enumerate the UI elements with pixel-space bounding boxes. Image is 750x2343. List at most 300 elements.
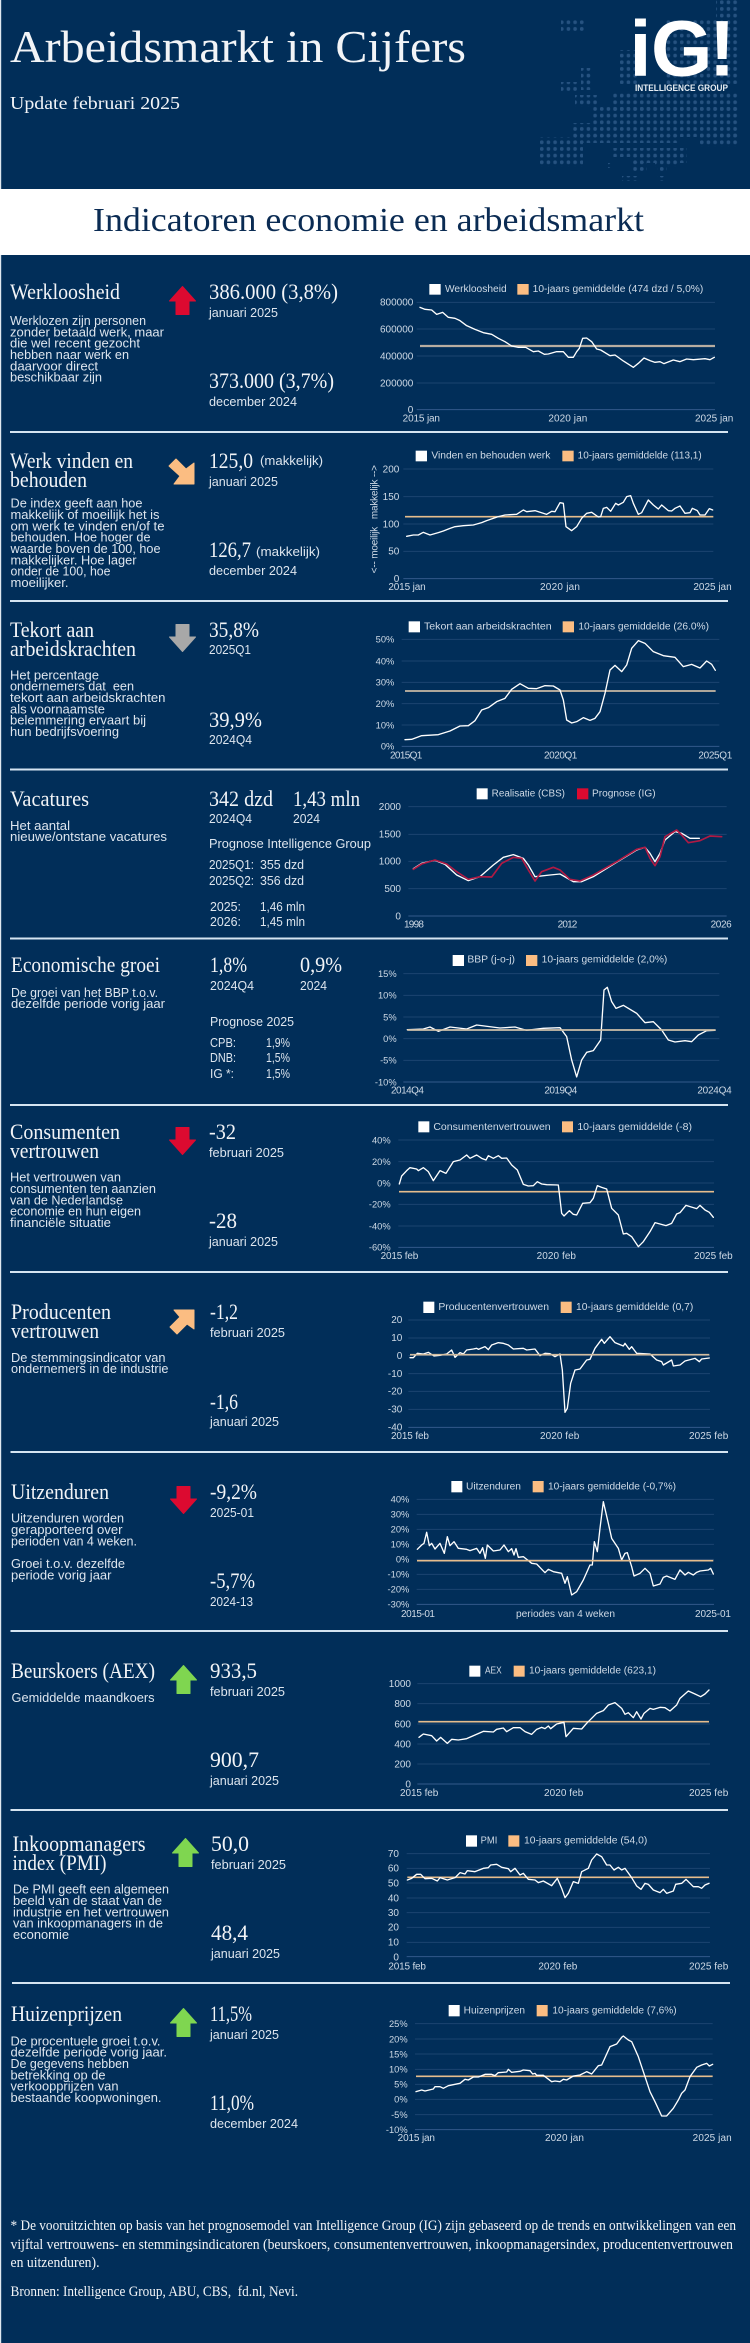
axis labels: 50 [388, 547, 400, 558]
axis labels: -40 [388, 1422, 403, 1433]
axis labels: 2020 feb [538, 1961, 578, 1972]
heading [12, 1831, 146, 1875]
year value [293, 786, 360, 826]
legend: Uitzenduren [466, 1481, 521, 1492]
axis labels: -30 [388, 1405, 403, 1416]
divider [10, 1809, 728, 1811]
current value [209, 617, 259, 657]
legend: 10-jaars gemiddelde (26.0%) [578, 621, 709, 632]
previous value [209, 707, 262, 747]
forecast table: 1,46 mln [260, 900, 305, 914]
previous value [209, 537, 320, 578]
axis labels: 1500 [379, 829, 401, 840]
panel: werk vinden en behouden [9, 448, 732, 593]
legend: 10-jaars gemiddelde (2,0%) [542, 955, 667, 966]
line chart: tekort aan arbeidskrachten [376, 621, 733, 761]
axis labels: 2015-01 [401, 1609, 435, 1620]
description: perioden van 4 weken. [11, 1534, 137, 1548]
current value: -1,2 [210, 1299, 238, 1324]
current value: 125,0 [209, 448, 253, 473]
quarter value: 342 dzd [209, 786, 273, 811]
icon: orange arrow up-right [170, 1310, 194, 1334]
legend [418, 1121, 692, 1133]
heading: Beurskoers (AEX) [11, 1658, 155, 1683]
previous value [210, 1568, 255, 1609]
current value [210, 1658, 285, 1699]
forecast table: 1,9% [266, 1036, 290, 1050]
previous value: -1,6 [210, 1389, 238, 1414]
footnote [10, 2218, 737, 2271]
axis labels: 20% [376, 699, 394, 709]
legend: Realisatie (CBS) [492, 788, 565, 799]
axis labels: 2020 feb [537, 1251, 576, 1262]
line chart: uitzenduren [388, 1481, 731, 1620]
axis labels: 0% [381, 742, 394, 752]
forecast table: 355 dzd [260, 858, 304, 872]
previous value [209, 1747, 279, 1788]
description: nieuwe/ontstane vacatures [10, 830, 167, 844]
legend: Tekort aan arbeidskrachten [424, 621, 552, 632]
forecast table: 2025Q2: [209, 874, 254, 888]
description: Uitzenduren worden [11, 1512, 124, 1526]
description: daarvoor direct [10, 359, 99, 373]
divider [10, 938, 728, 940]
icon: red arrow down [170, 1128, 196, 1154]
description: betrekking op de [10, 2068, 106, 2082]
heading: arbeidskrachten [10, 636, 136, 661]
description: financiële situatie [10, 1216, 111, 1230]
footnote: en uitzenduren). [10, 2255, 100, 2271]
divider [10, 1104, 728, 1106]
axis labels: 2012 [558, 919, 578, 930]
line chart: producentenvertrouwen [388, 1302, 729, 1442]
current value [209, 1119, 284, 1160]
logo: Intelligence Group: G [651, 4, 712, 92]
description [11, 1351, 169, 1376]
axis labels: 400 [394, 1739, 411, 1750]
current value: januari 2025 [208, 306, 278, 320]
axis labels: 50% [376, 635, 394, 645]
current value: 50,0 [211, 1831, 249, 1856]
forecast table: CPB: [210, 1036, 236, 1050]
axis labels [386, 2019, 732, 2144]
current value: januari 2025 [209, 2028, 279, 2042]
legend: 10-jaars gemiddelde (-8) [577, 1122, 692, 1133]
axis labels: 5% [383, 1012, 397, 1022]
line chart: economische groei [375, 955, 732, 1096]
previous value: december 2024 [210, 2117, 298, 2131]
axis labels: 100 [383, 519, 400, 530]
forecast table: Prognose Intelligence Group [209, 837, 371, 851]
axis labels: 25% [389, 2019, 408, 2029]
previous value [210, 2090, 298, 2131]
current value [209, 2001, 279, 2042]
year value: 2024 [300, 979, 327, 993]
axis labels [369, 1135, 733, 1262]
axis labels: 2015 feb [388, 1961, 426, 1972]
panel: uitzenduren [11, 1479, 731, 1620]
panel: werkloosheid [10, 279, 733, 425]
axis labels [388, 1849, 729, 1972]
description: gerapporteerd over [11, 1523, 122, 1537]
previous value: januari 2025 [210, 1947, 280, 1961]
line chart: werkloosheid [380, 284, 733, 425]
legend [453, 955, 667, 966]
legend [449, 2005, 677, 2016]
forecast table: 1,5% [266, 1067, 290, 1081]
heading [11, 1299, 111, 1343]
year value: 2024 [293, 812, 320, 826]
axis labels: -20% [369, 1200, 391, 1210]
icon: red arrow up [170, 286, 196, 314]
axis labels: 10% [391, 1540, 409, 1550]
description: Het aantal [10, 819, 70, 833]
year value: 0,9% [300, 952, 342, 977]
heading: vertrouwen [11, 1318, 99, 1343]
heading: Producenten [11, 1299, 111, 1324]
current value: januari 2025 [208, 475, 278, 489]
legend [451, 1481, 676, 1492]
axis labels [380, 298, 733, 425]
icon: green arrow up [170, 2008, 196, 2036]
legend: PMI [481, 1835, 497, 1846]
axis labels: 2015 feb [400, 1788, 439, 1799]
description: economie [13, 1928, 69, 1942]
forecast table: 2026: [210, 915, 241, 929]
heading: Huizenprijzen [11, 2001, 122, 2026]
header [10, 0, 740, 181]
quarter value: 1,8% [210, 952, 247, 977]
forecast table [210, 1015, 294, 1081]
axis labels: 30% [391, 1510, 409, 1520]
icon: green arrow up [172, 1838, 198, 1866]
legend: Vinden en behouden werk [431, 451, 550, 462]
quarter value [210, 952, 254, 993]
axis labels: 2015 jan [398, 2133, 435, 2144]
quarter value: 2024Q4 [210, 979, 254, 993]
description [9, 497, 165, 590]
previous value [209, 368, 334, 409]
axis labels: 500 [384, 884, 401, 895]
current value: februari 2025 [210, 1685, 285, 1699]
axis labels: 2020 jan [548, 414, 587, 425]
heading [10, 1119, 120, 1163]
axis labels: -20 [388, 1387, 403, 1398]
description [13, 1883, 169, 1942]
axis labels: 10% [376, 720, 394, 730]
decorative dot map of Europe [540, 0, 740, 181]
legend [423, 1302, 693, 1313]
legend: AEX [485, 1666, 502, 1677]
icon: grey arrow down [170, 624, 196, 652]
heading: Werk vinden en [10, 448, 133, 473]
axis labels: 2025Q1 [698, 750, 733, 761]
axis labels: -10% [375, 1077, 397, 1087]
description [11, 1512, 137, 1583]
axis labels: 10% [389, 2065, 408, 2075]
axis labels: 2015 feb [391, 1431, 429, 1442]
current value: (makkelijk) [260, 454, 323, 468]
legend: 10-jaars gemiddelde (54,0) [524, 1835, 647, 1846]
axis labels: 10% [378, 991, 397, 1001]
axis labels: 2025-01 [695, 1609, 731, 1620]
description: ondernemers dat een [10, 680, 134, 694]
description: beeld van de staat van de [13, 1894, 162, 1908]
current value: 2025-01 [210, 1506, 254, 1520]
axis labels: 60 [388, 1864, 399, 1875]
description: waarde boven de 100, hoe [9, 542, 161, 556]
axis labels: 0% [383, 1034, 397, 1044]
legend: 10-jaars gemiddelde (474 dzd / 5,0%) [533, 284, 703, 295]
current value: 11,5% [210, 2001, 252, 2026]
description: makkelijk of moeilijk het is [10, 508, 160, 522]
description: als voornaamste [10, 702, 105, 716]
axis labels: 600 [394, 1719, 411, 1730]
divider [10, 431, 728, 433]
current value [208, 279, 338, 320]
description [10, 314, 164, 385]
heading: index (PMI) [12, 1850, 106, 1875]
panel: inkoopmanagers index PMI [12, 1831, 729, 1972]
description [10, 668, 166, 739]
description: Het vertrouwen van [10, 1171, 121, 1185]
current value: 933,5 [210, 1658, 257, 1683]
legend [409, 621, 709, 632]
description: Het percentage [10, 668, 99, 682]
panel: tekort aan arbeidskrachten [10, 617, 733, 761]
description: De PMI geeft een algemeen [13, 1883, 169, 1897]
axis labels: -60% [369, 1243, 391, 1253]
previous value: -28 [209, 1208, 237, 1233]
description: consumenten ten aanzien [10, 1182, 156, 1196]
divider [10, 1271, 728, 1273]
axis labels [389, 1679, 729, 1799]
year value: 1,43 mln [293, 786, 360, 811]
description: hebben naar werk en [10, 348, 129, 362]
current value [210, 1299, 285, 1340]
axis labels: 600000 [380, 324, 414, 335]
previous value: januari 2025 [209, 1774, 279, 1788]
previous value: -5,7% [210, 1568, 255, 1593]
forecast table: 2025: [210, 900, 241, 914]
description: Groei t.o.v. dezelfde [11, 1557, 125, 1571]
axis labels: -10% [388, 1570, 409, 1580]
previous value: december 2024 [209, 564, 297, 578]
heading [10, 617, 136, 661]
previous value: 48,4 [211, 1920, 248, 1945]
panel: beurskoers AEX [11, 1658, 729, 1799]
axis labels: 2020 jan [540, 582, 580, 593]
divider [10, 1451, 728, 1453]
current value: -32 [209, 1119, 236, 1144]
axis labels: -5% [391, 2110, 408, 2120]
current value: 386.000 (3,8%) [209, 279, 338, 304]
forecast table: 2025Q1: [209, 858, 254, 872]
axis labels: 2020 jan [545, 2133, 584, 2144]
axis labels: 40% [376, 656, 394, 666]
description: hun bedrijfsvoering [10, 725, 119, 739]
axis labels: 2020 feb [544, 1788, 584, 1799]
previous value: 2024Q4 [209, 733, 252, 747]
axis labels: 2015 jan [403, 414, 440, 425]
legend: Huizenprijzen [464, 2005, 525, 2016]
forecast table: 1,45 mln [260, 915, 305, 929]
description [10, 1171, 156, 1230]
previous value: 126,7 [209, 537, 251, 562]
description: industrie en het vertrouwen [13, 1905, 169, 1919]
axis labels: 200 [394, 1759, 411, 1770]
axis labels: 2026 [711, 919, 732, 930]
forecast table: IG *: [210, 1067, 234, 1081]
description: moeilijker. [10, 576, 68, 590]
previous value [209, 1389, 279, 1429]
legend: 10-jaars gemiddelde (7,6%) [552, 2005, 677, 2016]
description: De procentuele groei t.o.v. [10, 2034, 160, 2048]
axis labels: 2014Q4 [391, 1085, 424, 1096]
current value: februari 2025 [211, 1858, 286, 1872]
axis labels: 20% [391, 1525, 409, 1535]
heading: vertrouwen [10, 1138, 99, 1163]
axis labels [369, 465, 732, 593]
legend [466, 1835, 647, 1847]
legend: Consumentenvertrouwen [433, 1122, 551, 1133]
current value: -9,2% [210, 1479, 257, 1504]
axis labels: 15% [378, 969, 397, 979]
axis labels: 1998 [404, 919, 424, 930]
axis labels [388, 1315, 729, 1442]
icon: orange arrow down-right [169, 459, 194, 484]
forecast table: 1,5% [266, 1051, 290, 1065]
previous value: 900,7 [210, 1747, 259, 1772]
previous value: december 2024 [209, 395, 297, 409]
axis labels: 2025 jan [693, 582, 732, 593]
current value: 2025Q1 [209, 643, 251, 657]
legend: Producentenvertrouwen [438, 1302, 549, 1313]
previous value: januari 2025 [208, 1235, 278, 1249]
description: ondernemers in de industrie [11, 1362, 169, 1376]
axis labels: 2025 jan [693, 2133, 732, 2144]
axis labels: -5% [380, 1056, 397, 1066]
axis labels [379, 802, 732, 930]
previous value: 2024-13 [210, 1595, 253, 1609]
panel: economische groei [11, 952, 732, 1096]
description: onder de 100, hoe [10, 565, 111, 579]
panel: producentenvertrouwen [11, 1299, 729, 1442]
logo: Intelligence Group [630, 4, 735, 94]
axis labels: -10% [386, 2125, 408, 2135]
heading: Werkloosheid [10, 279, 120, 304]
current value: februari 2025 [209, 1146, 284, 1160]
axis labels: 150 [383, 492, 400, 503]
previous value: 373.000 (3,7%) [209, 368, 334, 393]
quarter value [209, 786, 273, 826]
axis labels: 20% [389, 2034, 408, 2044]
description: behouden. Hoe hoger de [10, 531, 151, 545]
axis labels: 2015 jan [388, 582, 426, 593]
current value [208, 448, 323, 489]
axis labels: 15% [389, 2049, 408, 2059]
axis labels [376, 635, 733, 761]
description: De groei van het BBP t.o.v. [11, 986, 158, 1000]
previous value: januari 2025 [209, 1415, 279, 1429]
axis labels: -20% [388, 1585, 409, 1595]
description: Werklozen zijn personen [10, 314, 146, 328]
panel: huizenprijzen [10, 2001, 732, 2144]
heading: Inkoopmanagers [12, 1831, 146, 1856]
axis labels: 0% [394, 2095, 408, 2105]
description: De index geeft aan hoe [10, 497, 143, 511]
axis labels: 30% [376, 678, 394, 688]
description: dezelfde periode vorig jaar. [10, 2046, 167, 2060]
description: De gegevens hebben [10, 2057, 129, 2071]
axis labels: 1000 [389, 1679, 411, 1690]
quarter value: 2024Q4 [209, 812, 252, 826]
logo: Intelligence Group: INTELLIGENCE GROUP [635, 83, 729, 94]
legend: 10-jaars gemiddelde (623,1) [529, 1666, 656, 1677]
heading: Uitzenduren [11, 1479, 109, 1504]
axis labels: 30 [388, 1908, 399, 1919]
heading: Economische groei [11, 952, 160, 977]
axis labels: 1000 [379, 857, 401, 868]
legend [416, 451, 702, 462]
icon: green arrow up [170, 1666, 196, 1694]
logo: Intelligence Group: ! [709, 4, 735, 92]
axis labels: 40% [391, 1495, 409, 1505]
divider [10, 600, 728, 602]
axis labels: 50 [388, 1878, 399, 1889]
logo: Intelligence Group: i [630, 4, 651, 92]
axis labels: 0 [393, 1952, 399, 1963]
axis labels: 2025 feb [694, 1251, 733, 1262]
axis labels: 0 [408, 405, 414, 416]
axis labels: 10 [391, 1333, 403, 1344]
axis labels: 2019Q4 [544, 1085, 578, 1096]
section heading band: Indicatoren economie en arbeidsmarkt [93, 202, 645, 239]
legend: Prognose (IG) [592, 788, 656, 799]
previous value: 11,0% [210, 2090, 254, 2115]
axis labels: 2020 feb [540, 1431, 580, 1442]
year value [300, 952, 342, 993]
axis labels: 0 [394, 574, 400, 585]
axis labels: -40% [369, 1221, 391, 1231]
axis labels: periodes van 4 weken [516, 1609, 615, 1620]
description: economie en hun eigen [10, 1205, 141, 1219]
axis labels: 70 [388, 1849, 399, 1860]
line chart: beurskoers AEX [389, 1666, 729, 1799]
description: De stemmingsindicator van [11, 1351, 166, 1365]
axis labels: 2020Q1 [544, 750, 578, 761]
heading: Consumenten [10, 1119, 120, 1144]
legend [477, 788, 656, 799]
forecast table: Prognose 2025 [210, 1015, 294, 1029]
forecast table: 356 dzd [260, 874, 304, 888]
axis labels: 2000 [379, 802, 401, 813]
axis labels: 0 [405, 1779, 411, 1790]
axis labels: 2025 feb [689, 1431, 729, 1442]
axis labels: 0% [377, 1178, 391, 1188]
description [10, 2034, 167, 2105]
previous value: (makkelijk) [256, 545, 320, 559]
divider [10, 1630, 728, 1632]
line chart: huizenprijzen [386, 2005, 732, 2144]
description: tekort aan arbeidskrachten [10, 691, 166, 705]
section heading band [0, 189, 750, 255]
panel: vacatures [10, 786, 732, 930]
current value [211, 1831, 286, 1872]
legend: 10-jaars gemiddelde (113,1) [578, 451, 702, 462]
axis labels: 2015Q1 [390, 750, 423, 761]
description: Gemiddelde maandkoers [12, 1691, 154, 1705]
